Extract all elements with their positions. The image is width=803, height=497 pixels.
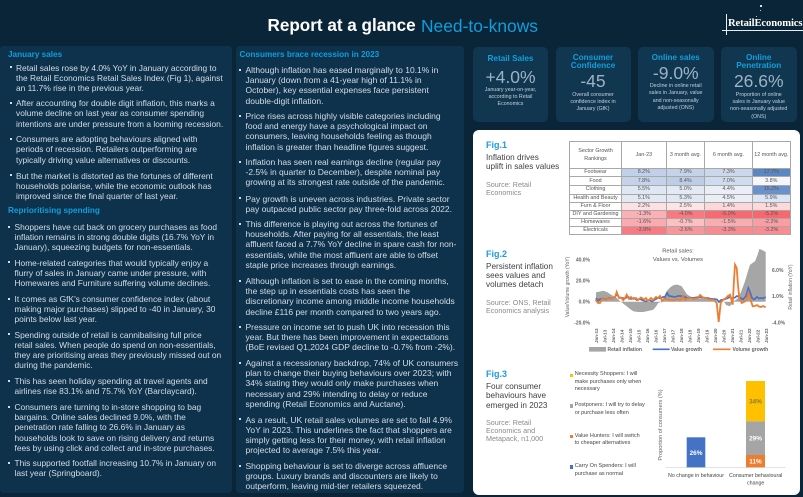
x axis labels: Jan-15 — [628, 328, 633, 343]
table: sector growth rankings: Health and Beauty — [573, 195, 618, 201]
table: sector growth rankings: -5.0% — [721, 211, 736, 217]
text: bullet spending outside retail: Spending outside of retail is cannibalising full price — [14, 330, 202, 340]
chart title: Retail sales: — [662, 248, 694, 254]
stat card: Consumer Confidence — [556, 47, 630, 122]
stat card: Online Penetration: non-seasonally adjusted — [730, 106, 787, 112]
table: sector growth rankings: -0.7% — [678, 219, 693, 225]
text: bullet affluence groups: Shopping behaviour is set to diverge across affluence — [246, 461, 447, 471]
text: bullet price rises: consumers, leaving households feeling as though — [246, 131, 432, 141]
text: bullet real earnings: -2.5% in quarter to December), despite nominal pay — [246, 167, 440, 177]
text: bullet sales volumes: As a result, UK retail sales volumes are set to fall 4.9% — [246, 414, 452, 424]
text: bullet holiday spending — [14, 376, 208, 396]
text: bullet sales volumes: simply getting less for their money, with retail inflation — [246, 435, 446, 445]
text: bullet holiday spending: airlines rise 83.1% and 75.7% YoY (Barclaycard). — [14, 386, 197, 396]
table: sector growth rankings: -1.6% — [637, 219, 651, 225]
table: sector growth rankings: 2.2% — [638, 203, 650, 209]
text: bullet real earnings: growing at its strongest rate outside of the pandemic. — [246, 177, 445, 187]
text: bullet recession behaviours: periods of recession. Retailers outperforming are — [16, 144, 197, 154]
text: Fig.2 caption: Economics analysis — [486, 306, 549, 315]
text: bullet volume decline — [16, 98, 223, 129]
right axis: 1.0% — [772, 294, 784, 300]
stat card: Online Penetration — [721, 47, 796, 122]
x axis labels: No change in behaviour — [668, 473, 724, 479]
x axis labels: Consumer behavioural — [729, 473, 782, 479]
table: sector growth rankings: 6 month avg. — [713, 152, 744, 158]
text: bullet inflation eased: October), key essential expenses face persistent — [246, 85, 429, 95]
table: sector growth rankings: 4.4% — [722, 186, 735, 192]
x axis labels: Jan-13 — [594, 328, 599, 343]
table: sector growth rankings: 7.9% — [679, 169, 692, 175]
text: bullet grocery: January), squeezing budgets for non-essentials. — [14, 242, 193, 252]
table: sector growth rankings: 2.5% — [679, 203, 692, 209]
table: sector growth rankings: -2.2% — [764, 219, 778, 225]
text: Fig.2 caption — [486, 249, 553, 315]
text: bullet recession behaviours: Consumers are adopting behaviours aligned with — [16, 134, 198, 144]
x axis labels: Jul-20 — [722, 329, 726, 343]
stat card: Online sales: -9.0% — [653, 62, 699, 82]
text: bullet affluence groups — [246, 461, 447, 492]
text: bullet affluence groups: groups. Luxury brands and discounters are likely to — [246, 471, 438, 481]
table: sector growth rankings: -3.2% — [764, 227, 778, 233]
table: sector growth rankings: 8.4% — [679, 178, 692, 184]
panel: middle text column — [236, 46, 464, 493]
text: bullet discretionary income: discretionary income among middle income households — [246, 296, 455, 306]
text: bullet grocery — [14, 222, 217, 253]
text: bullet affluence groups: outperform, leaving mid-tier retailers squeezed. — [246, 481, 423, 491]
table: sector growth rankings: Clothing — [586, 186, 605, 192]
stat card: Retail Sales: according to Retail — [489, 94, 532, 100]
table: sector growth rankings — [569, 141, 791, 235]
text: bullet price rises — [246, 111, 441, 152]
x axis labels: Jan-20 — [713, 328, 718, 343]
table: sector growth rankings: 3 month avg. — [670, 152, 701, 158]
table: sector growth rankings: DIY and Gardening — [572, 211, 619, 217]
text: bullet footfall: This supported footfall increasing 10.7% in January on — [14, 458, 216, 468]
text: bullet inflation eased: double-digit inflation. — [246, 96, 323, 106]
text: bullet sales volumes: projected to average 7.5% this year. — [246, 445, 381, 455]
table: sector growth rankings: Food — [589, 178, 602, 184]
text: bullet in-store shopping: Consumers are turning to in-store shopping to bag — [14, 402, 201, 412]
table: sector growth rankings: -4.0% — [678, 211, 693, 217]
text: Fig.2 caption: Fig.2 — [486, 249, 507, 259]
title: Report at a glance — [268, 16, 416, 35]
left axis — [574, 258, 591, 326]
stat card: Retail Sales: Retail Sales — [488, 54, 533, 62]
text: bullet inflation eased: January (down from a 41-year high of 11.1% in — [246, 75, 422, 85]
x axis labels: Jan-19 — [696, 328, 701, 343]
legend: consumer behaviours: Necessity Shoppers: I will — [575, 371, 637, 377]
legend: Volume growth — [732, 347, 768, 353]
stat card: Consumer Confidence: confidence index in — [570, 99, 616, 105]
text: bullet spending outside retail: retail sales. When people do spend on non-essentials, — [14, 340, 216, 350]
line chart: retail sales values vs volumes — [565, 248, 794, 353]
text: bullet recession pressure — [246, 322, 455, 353]
axis label: Proportion of consumers (%) — [658, 389, 664, 461]
table: sector growth rankings: 7.8% — [638, 178, 650, 184]
text: bullet market distorted: households polarise, while the economic outlook has — [16, 181, 212, 191]
text: bullet retail sales — [16, 62, 223, 93]
panel: white charts panel — [473, 130, 800, 495]
text: bullet pay growth: Pay growth is uneven across industries. Private sector — [246, 194, 450, 204]
text: bullet in-store shopping: fees by using click and collect and in-store purchases. — [14, 443, 215, 453]
table: sector growth rankings: Footwear — [584, 169, 607, 175]
heading: Reprioritising spending: Reprioritising spending — [8, 206, 100, 215]
table: sector growth rankings: Furn & Floor — [581, 203, 610, 209]
bar: behavioural change stack: 11% — [749, 458, 762, 466]
left axis: 0.0% — [579, 300, 591, 306]
stat card: Consumer Confidence: Overall consumer — [572, 92, 614, 98]
x axis labels: Jul-21 — [738, 329, 744, 343]
stat card: Online sales: and non-seasonally — [653, 98, 699, 104]
title — [268, 16, 538, 36]
text: bullet GfK — [14, 294, 215, 325]
text: bullet volume decline: intentions are under pressure from a looming recession. — [16, 119, 223, 129]
table: sector growth rankings: 7.0% — [722, 178, 735, 184]
table: sector growth rankings: 1.5% — [765, 203, 777, 209]
text: bullet household fortunes: households. After paying for all essentials, the least — [246, 229, 439, 239]
text: bullet buying behaviours — [246, 358, 458, 409]
text: bullet discretionary income — [246, 276, 455, 317]
legend: consumer behaviours: to cheaper alternatives — [575, 440, 630, 446]
legend: consumer behaviours: necessary — [575, 386, 600, 392]
table: sector growth rankings: 12 month avg. — [754, 152, 788, 158]
text: bullet retail sales: Retail sales rose by 4.0% YoY in January according to — [16, 62, 216, 72]
text: Fig.3 caption — [486, 369, 548, 443]
text: bullet market distorted — [16, 170, 213, 201]
left axis: -20.0% — [574, 320, 591, 326]
x axis labels: Jul-13 — [602, 329, 608, 343]
table: sector growth rankings: 5.0% — [679, 186, 692, 192]
stat card: Consumer Confidence: Confidence — [571, 61, 615, 70]
legend item: value hunters — [570, 433, 640, 446]
legend — [589, 347, 768, 353]
text: Fig.3 caption: Four consumer — [486, 382, 541, 391]
text: Fig.3 caption: Fig.3 — [486, 369, 507, 379]
title: Need-to-knows — [421, 16, 538, 36]
text: bullet buying behaviours: 34% stating they would only make purchases when — [246, 378, 438, 388]
text: bullet recession pressure: year. But there has been improvement in expectations — [246, 332, 449, 342]
text: Fig.3 caption: Source: Retail — [486, 418, 531, 426]
text: bullet market distorted: But the market is distorted as the fortunes of different — [16, 170, 213, 180]
x axis labels: Jan-16 — [645, 328, 650, 343]
left axis label: Value/Volume growth (YoY) — [565, 256, 571, 317]
heading: Consumers brace recession in 2023: Consumers brace recession in 2023 — [240, 50, 379, 59]
text: bullet grocery: inflation remains in strong double digits (16.7% YoY in — [14, 232, 214, 242]
table: sector growth rankings: -3.3% — [721, 227, 736, 233]
text: bullet real earnings: Inflation has seen real earnings decline (regular pay — [246, 157, 441, 167]
table: sector growth rankings: 4.5% — [722, 195, 735, 201]
legend item: carry on spenders — [570, 463, 636, 477]
table: sector growth rankings: -1.3% — [637, 211, 651, 217]
panel: left text column — [0, 46, 232, 493]
text: bullet in-store shopping: bargains. Online sales declined 9.0%, with the — [14, 412, 186, 422]
text: bullet recession pressure: (BoE revised Q1,2024 GDP decline to -0.7% from -2%). — [246, 342, 455, 352]
x axis labels: Jul-22 — [756, 329, 760, 343]
text: bullet sales volumes — [246, 414, 452, 456]
table: sector growth rankings: Sector Growth — [578, 148, 613, 154]
legend: consumer behaviours: Carry On Spenders: I will — [575, 463, 636, 469]
text: bullet buying behaviours: spending (Retail Economics and Auctane). — [246, 399, 406, 409]
text: bullet GfK: making major purchases) slipped to -40 in January, 30 — [14, 304, 215, 314]
text: bullet holiday spending: This has seen holiday spending at travel agents and — [14, 376, 208, 386]
text: bullet household fortunes: essentials, while the most affluent are able to offset — [246, 250, 438, 260]
stat card: Online sales — [638, 47, 714, 122]
table: sector growth rankings: -3.9% — [637, 227, 651, 233]
text: Fig.1 caption — [486, 140, 559, 197]
x axis labels: Jul-15 — [636, 329, 642, 343]
text: bullet footfall: last year (Springboard). — [14, 468, 102, 478]
stat card: Online Penetration: 26.6% — [734, 71, 784, 91]
text: bullet buying behaviours: plan to change their buying behaviours over 2023; with — [246, 368, 452, 378]
table: sector growth rankings: 5.9% — [765, 195, 777, 201]
stat card: Retail Sales: January year-on-year, — [485, 86, 536, 92]
line: volume growth — [596, 265, 766, 322]
stat card: Online sales: adjusted (ONS) — [657, 105, 694, 111]
text: bullet GfK: It comes as GfK's consumer confidence index (about — [14, 294, 210, 304]
table: sector growth rankings: -1.5% — [721, 219, 736, 225]
left axis: 40.0% — [576, 258, 591, 264]
text: bullet market distorted: improved since the final quarter of last year. — [16, 191, 178, 201]
logo: Retail Economics: RetailEconomics — [728, 18, 802, 29]
text: bullet in-store shopping: households look to save on rising delivery and returns — [14, 433, 214, 443]
stat card: Online Penetration: Proportion of online — [736, 92, 782, 98]
line chart: retail sales values vs volumes: Values vs. Volumes — [653, 257, 703, 263]
stat card: Online sales: Online sales — [652, 52, 700, 62]
bar: behavioural change stack: 29% — [749, 436, 762, 442]
text: Fig.1 caption: Inflation drives — [486, 153, 539, 162]
text: bullet real earnings — [246, 157, 445, 188]
x axis labels: change — [747, 481, 764, 487]
x axis labels: Jul-19 — [704, 329, 710, 343]
legend: Retail inflation — [608, 347, 642, 353]
table: sector growth rankings: -5.2% — [764, 211, 778, 217]
text: Fig.2 caption: sees values and — [486, 271, 545, 280]
table: sector growth rankings: 8.2% — [638, 169, 650, 175]
text: bullet spending outside retail: they are prioritising areas they previously missed out on — [14, 350, 221, 360]
right axis: -4.0% — [772, 320, 786, 326]
text: Fig.3 caption: Economics and — [486, 426, 535, 435]
text: bullet volume decline: volume decline on last year as consumer spending — [16, 108, 204, 118]
stat card: Online sales: Decline in online retail — [650, 83, 702, 89]
text: bullet inflation eased: Although inflation has eased marginally to 10.1% in — [246, 65, 438, 75]
text: bullet discretionary income: decline £116 per month compared to two years ago. — [246, 307, 441, 317]
text: bullet discretionary income: the step up in essentials costs has seen the — [246, 286, 410, 296]
text: bullet GfK: points below last year. — [14, 314, 97, 324]
heading: January sales: January sales — [8, 50, 62, 59]
x axis labels: Jan-17 — [662, 328, 667, 343]
x axis labels: Jan-21 — [730, 328, 735, 343]
table: sector growth rankings: Electricals — [583, 227, 608, 233]
text: bullet retail sales: an 11.7% rise in the previous year. — [16, 83, 144, 93]
text: bullet recession pressure: Pressure on income set to push UK into recession this — [246, 322, 450, 332]
text: bullet price rises: inflation is greater than headline figures suggest. — [246, 142, 428, 152]
right axis: 6.0% — [772, 268, 784, 274]
text: bullet recession behaviours: typically driving value alternatives or discounts. — [16, 155, 190, 165]
text: Fig.2 caption: volumes detach — [486, 280, 543, 289]
left axis: 20.0% — [576, 278, 591, 284]
bar: no change: 26% — [690, 450, 703, 457]
legend: consumer behaviours: or purchase less often — [575, 410, 629, 416]
area: retail inflation — [596, 249, 766, 302]
text: Fig.2 caption: Source: ONS, Retail — [486, 298, 551, 307]
stat card: Online Penetration: Penetration — [736, 61, 781, 70]
text: bullet volume decline: After accounting for double digit inflation, this marks a — [16, 98, 215, 108]
x axis labels: Jan-18 — [679, 328, 684, 343]
text: bullet recession behaviours — [16, 134, 198, 165]
x axis labels: Jul-16 — [654, 329, 658, 343]
text: bullet home categories: Home-related categories that would typically enjoy a — [14, 258, 208, 268]
text: bullet in-store shopping — [14, 402, 215, 453]
legend: consumer behaviours: purchase as normal — [575, 471, 623, 477]
x axis labels: Jul-17 — [670, 329, 676, 343]
text: Fig.2 caption: Persistent inflation — [486, 262, 553, 270]
table: sector growth rankings: 1.4% — [722, 203, 735, 209]
text: bullet pay growth — [246, 194, 452, 214]
x axis labels: Jul-14 — [620, 329, 624, 343]
text: Fig.3 caption: behaviours have — [486, 391, 546, 400]
x axis labels: Jan-14 — [611, 328, 616, 343]
text: bullet household fortunes: affluent faced a 7.7% YoY decline in spare cash for non- — [246, 239, 456, 249]
legend: Value growth — [671, 347, 702, 353]
x axis labels: Jul-18 — [688, 329, 692, 343]
table: sector growth rankings: -2.6% — [678, 227, 693, 233]
text: Fig.1 caption: Economics — [486, 188, 521, 197]
legend: consumer behaviours: Postponers: I will try to delay — [575, 402, 645, 408]
stat card: Consumer Confidence: -45 — [580, 71, 606, 91]
stat card: Online sales: sales in January, value — [649, 90, 702, 96]
table: sector growth rankings: 17.7% — [764, 169, 779, 175]
text: bullet household fortunes: This difference is playing out across the fortunes of — [246, 219, 437, 229]
stat card: Online Penetration: Online — [746, 52, 771, 62]
legend: consumer behaviours: Value Hunters: I will switch — [575, 433, 640, 439]
stat card: Consumer Confidence: January (GfK) — [577, 106, 609, 112]
x axis labels: Jan-22 — [747, 328, 752, 343]
text: bullet spending outside retail: during the pandemic. — [14, 360, 93, 370]
table: sector growth rankings: 7.3% — [722, 169, 735, 175]
text: Fig.3 caption: Metapack, n1,000 — [486, 434, 543, 443]
bar: behavioural change stack: 34% — [749, 398, 762, 406]
text: bullet buying behaviours: necessary and 29% intending to delay or reduce — [246, 389, 427, 399]
text: bullet household fortunes: staple price increases through earnings. — [246, 260, 396, 270]
text: Fig.3 caption: emerged in 2023 — [486, 400, 547, 410]
legend: consumer behaviours: make purchases only when — [575, 379, 641, 385]
x axis labels — [668, 473, 782, 487]
text: bullet in-store shopping: penetration rate falling to 26.6% in January as — [14, 422, 185, 432]
legend item: postponers — [570, 402, 645, 416]
table: sector growth rankings: 5.3% — [679, 195, 692, 201]
text: bullet retail sales: the Retail Economics Retail Sales Index (Fig 1), against — [16, 73, 223, 83]
right axis — [772, 268, 786, 326]
table: sector growth rankings: 5.1% — [638, 195, 650, 201]
stat card: Online Penetration: (ONS) — [751, 114, 766, 120]
text: bullet price rises: Price rises across highly visible categories including — [246, 111, 441, 121]
table: sector growth rankings: Rankings — [584, 156, 607, 162]
stat card: Online Penetration: sales in January value — [733, 99, 785, 105]
text: bullet discretionary income: Although inflation is set to ease in the coming months, — [246, 276, 449, 286]
legend: consumer behaviours — [570, 371, 645, 477]
table: sector growth rankings: Homewares — [581, 219, 610, 225]
text: bullet footfall — [14, 458, 216, 478]
text: bullet home categories — [14, 258, 210, 288]
stat card: Retail Sales — [473, 47, 548, 122]
stat card: Retail Sales: Economics — [498, 101, 523, 107]
text: bullet home categories: flurry of sales in January came under pressure, with — [14, 268, 206, 278]
bar chart: consumer behaviours — [658, 381, 786, 487]
text: bullet spending outside retail — [14, 330, 221, 371]
line: value growth — [596, 288, 766, 302]
x axis labels — [594, 328, 769, 343]
text: Fig.1 caption: Fig.1 — [486, 140, 507, 150]
text: bullet inflation eased — [246, 65, 438, 106]
x axis labels: Jan-23 — [764, 328, 769, 343]
text: bullet household fortunes — [246, 219, 456, 270]
right axis label: Retail inflation (YoY) — [788, 264, 794, 310]
table: sector growth rankings: 5.5% — [638, 186, 650, 192]
text: Fig.1 caption: uplift in sales values — [486, 162, 559, 171]
legend item: necessity shoppers — [570, 371, 641, 392]
bar: behavioural change stack — [746, 381, 765, 467]
table: sector growth rankings: 15.2% — [764, 186, 779, 192]
text: bullet price rises: food and energy have a psychological impact on — [246, 121, 427, 131]
stat card: Consumer Confidence: Consumer — [573, 52, 613, 62]
text: bullet home categories: Homewares and Furniture suffering volume declines. — [14, 278, 210, 288]
table: sector growth rankings: 3.8% — [765, 178, 777, 184]
text: bullet sales volumes: YoY in 2023. This underlines the fact that shoppers are — [246, 425, 452, 435]
text: bullet pay growth: pay outpaced public sector pay three-fold across 2022. — [246, 204, 452, 214]
text: bullet buying behaviours: Against a recessionary backdrop, 74% of UK consumers — [246, 358, 458, 368]
text: Fig.1 caption: Source: Retail — [486, 180, 531, 188]
table: sector growth rankings: Jan-23 — [636, 152, 652, 158]
text: bullet grocery: Shoppers have cut back on grocery purchases as food — [14, 222, 217, 232]
stat card: Retail Sales: +4.0% — [485, 67, 536, 87]
